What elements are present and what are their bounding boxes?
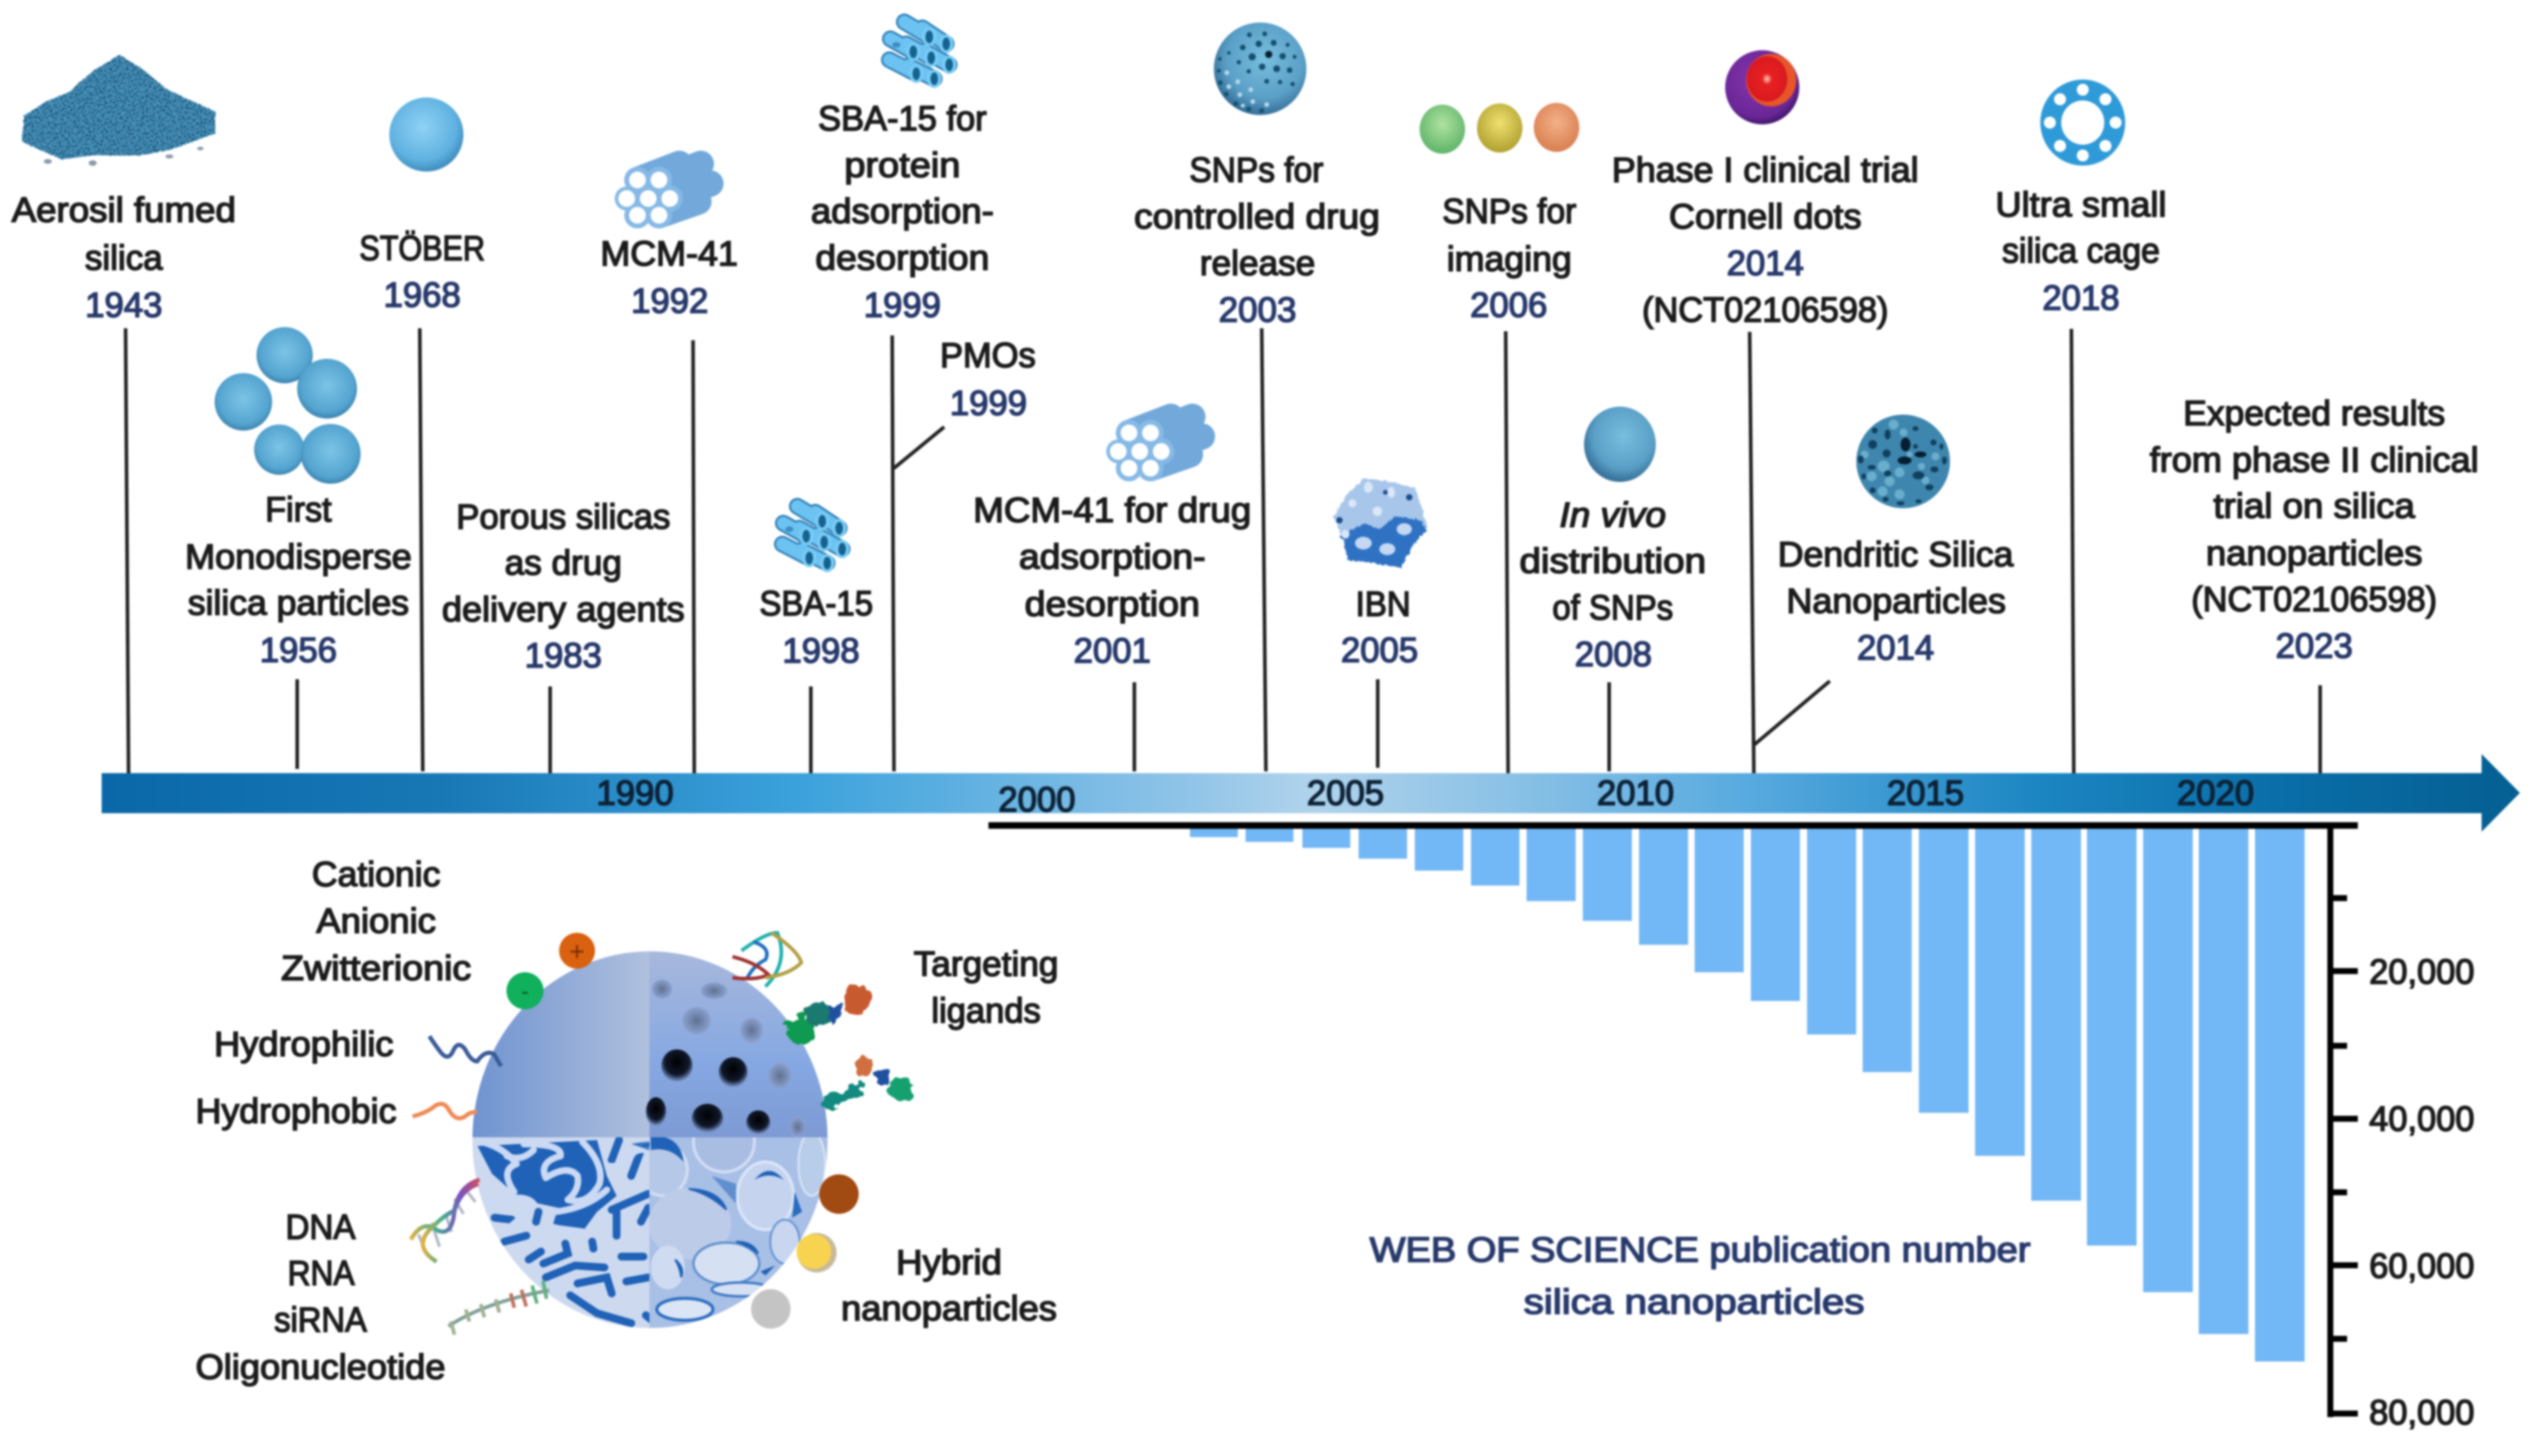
event: SBA-15 for protein adsorption-desorption 1999: 1999	[863, 286, 941, 325]
icon: charged groups: -	[521, 978, 529, 1005]
axis baseline	[988, 822, 2358, 829]
label: targeting ligands	[914, 945, 1058, 1030]
chart title	[1369, 1231, 2031, 1321]
event: Phase I clinical trial Cornell dots 2014: Phase I clinical trial	[1612, 151, 1918, 190]
event: MCM-41 for drug adsorption-desorption 2001: desorption	[1025, 585, 1200, 624]
event: Ultra small silica cage 2018: silica cage	[2002, 231, 2160, 270]
label: targeting ligands: ligands	[932, 991, 1040, 1030]
event: Expected phase II results 2023: 2023	[2276, 627, 2352, 666]
chart title: WEB OF SCIENCE publication number	[1369, 1231, 2031, 1269]
event: Phase I clinical trial Cornell dots 2014	[1612, 50, 1918, 329]
event: Aerosil fumed silica 1943: 1943	[85, 286, 163, 325]
icon: dendritic sphere	[1856, 414, 1950, 508]
decade labels: 2010	[1597, 774, 1674, 813]
event: Porous silicas as drug delivery agents 1983	[442, 497, 685, 675]
label: nucleic acids	[196, 1208, 445, 1387]
event: Dendritic Silica Nanoparticles 2014: 2014	[1857, 628, 1934, 667]
event: PMOs 1999: PMOs	[940, 336, 1036, 375]
event: SBA-15 1998: SBA-15	[759, 584, 873, 623]
event: Porous silicas as drug delivery agents 1983: delivery agents	[442, 590, 685, 629]
panel: functionalised silica nanoparticle	[196, 855, 1058, 1387]
event: SNPs for controlled drug release 2003: release	[1200, 244, 1316, 283]
chart title: silica nanoparticles	[1524, 1283, 1864, 1321]
event: MCM-41 1992: MCM-41	[600, 234, 738, 273]
event: SNPs for controlled drug release 2003: 2003	[1219, 291, 1296, 329]
label: surface charge: Cationic	[312, 855, 440, 894]
icon: SBA-15 rod	[782, 506, 849, 572]
event: SNPs for controlled drug release 2003: controlled drug	[1134, 197, 1380, 236]
label: nucleic acids: siRNA	[274, 1301, 367, 1339]
event: Expected phase II results 2023: from phase II clinical	[2150, 441, 2479, 480]
decade labels: 2000	[999, 780, 1075, 819]
icon: MCM-41 porous rod	[615, 164, 710, 228]
event: Aerosil fumed silica 1943: Aerosil fumed	[12, 191, 236, 230]
event: SNPs for controlled drug release 2003: SNPs for	[1189, 151, 1323, 190]
event: Porous silicas as drug delivery agents 1983: as drug	[505, 544, 622, 582]
decade labels: 2005	[1307, 774, 1384, 813]
event: Expected phase II results 2023: Expected results	[2183, 394, 2445, 433]
event: IBN 2005: 2005	[1341, 631, 1418, 670]
label: hybrid nanoparticles	[841, 1243, 1057, 1328]
bar chart: publications per year	[988, 822, 2474, 1432]
icon: IBN lattice	[1333, 478, 1427, 568]
pores: mesoporous quadrant	[646, 979, 806, 1137]
event: Expected phase II results 2023: nanoparticles	[2206, 534, 2422, 573]
icon: charged groups	[506, 933, 595, 1009]
label: surface charge: Zwitterionic	[281, 949, 471, 988]
event: SNPs for imaging 2006	[1420, 103, 1579, 325]
event: MCM-41 for drug adsorption-desorption 2001: MCM-41 for drug	[974, 491, 1251, 530]
event: PMOs 1999	[940, 336, 1036, 423]
event: Dendritic Silica Nanoparticles 2014: Nanoparticles	[1787, 582, 2006, 621]
event: First monodisperse silica particles 1956: 1956	[260, 631, 337, 670]
icon: charged groups: +	[569, 937, 585, 966]
event: First monodisperse silica particles 1956: Monodisperse	[185, 538, 411, 576]
event: SBA-15 1998: 1998	[782, 631, 860, 670]
event: SNPs for imaging 2006: imaging	[1447, 240, 1571, 279]
icon: three coloured spheres	[1420, 103, 1579, 154]
event: MCM-41 for drug adsorption-desorption 2001: adsorption-	[1019, 538, 1206, 576]
icon: targeting ligands	[733, 933, 913, 1109]
event: SBA-15 for protein adsorption-desorption 1999: SBA-15 for	[818, 99, 987, 138]
event: In vivo distribution of SNPs 2008: In vivo	[1560, 496, 1666, 535]
event: First monodisperse silica particles 1956	[185, 327, 411, 670]
event: Phase I clinical trial Cornell dots 2014: Cornell dots	[1669, 197, 1862, 236]
event: SNPs for imaging 2006: SNPs for	[1442, 192, 1576, 231]
event: SNPs for controlled drug release 2003	[1134, 23, 1380, 329]
event: MCM-41 1992: 1992	[631, 282, 708, 320]
label: surface charge	[281, 855, 471, 988]
event: PMOs 1999: 1999	[950, 384, 1027, 423]
event: Porous silicas as drug delivery agents 1983: Porous silicas	[456, 497, 670, 536]
label: nucleic acids: Oligonucleotide	[196, 1348, 445, 1387]
timeline connector lines	[126, 328, 2320, 773]
icon: five spheres	[215, 327, 361, 484]
event: Phase I clinical trial Cornell dots 2014: (NCT02106598)	[1642, 291, 1888, 329]
event: Ultra small silica cage 2018: 2018	[2043, 279, 2119, 318]
cavities: large-pore quadrant	[648, 1136, 827, 1323]
label: hybrid nanoparticles: Hybrid	[896, 1243, 1002, 1282]
icon: hybrid nanoparticle spheres	[751, 1174, 859, 1329]
event: SBA-15 1998	[759, 506, 873, 670]
label: targeting ligands: Targeting	[914, 945, 1058, 984]
event: First monodisperse silica particles 1956: First	[266, 490, 331, 529]
event: In vivo distribution of SNPs 2008: 2008	[1575, 635, 1652, 674]
event: Aerosil fumed silica 1943: silica	[85, 239, 163, 277]
y axis labels	[2369, 953, 2474, 1432]
decade labels: 2015	[1887, 774, 1964, 813]
decade labels	[597, 774, 2254, 819]
label: hydrophilic: Hydrophilic	[214, 1025, 393, 1064]
icon: silica cage ring	[2040, 80, 2125, 166]
event: MCM-41 for drug adsorption-desorption 2001: 2001	[1074, 631, 1151, 670]
y axis	[2327, 825, 2358, 1417]
icon: hydrophilic chain	[429, 1036, 501, 1066]
event: Phase I clinical trial Cornell dots 2014: 2014	[1727, 244, 1803, 283]
labyrinth: worm-like quadrant	[477, 1136, 651, 1329]
event: First monodisperse silica particles 1956: silica particles	[188, 584, 409, 622]
label: hydrophobic: Hydrophobic	[196, 1092, 396, 1131]
icon: DNA helix	[411, 1180, 480, 1262]
event: Dendritic Silica Nanoparticles 2014	[1778, 414, 2014, 667]
event: MCM-41 1992	[600, 164, 738, 320]
icon: nanoparticle sphere	[472, 951, 829, 1329]
event: SBA-15 for protein adsorption-desorption 1999	[811, 22, 994, 325]
label: nucleic acids: RNA	[288, 1254, 355, 1293]
event: Porous silicas as drug delivery agents 1983: 1983	[525, 636, 602, 675]
event: SNPs for imaging 2006: 2006	[1470, 286, 1548, 325]
label: nucleic acids: DNA	[286, 1208, 356, 1247]
y axis labels: 40,000	[2369, 1100, 2474, 1138]
y axis labels: 60,000	[2369, 1247, 2474, 1286]
y axis labels: 20,000	[2369, 953, 2474, 991]
bars	[1190, 829, 2305, 1362]
event: Ultra small silica cage 2018: Ultra small	[1995, 185, 2166, 224]
event: SBA-15 for protein adsorption-desorption 1999: protein	[844, 146, 960, 185]
event: Stöber 1968: STÖBER	[359, 229, 485, 268]
icon: oligonucleotide strand	[448, 1281, 549, 1335]
icon: sphere	[1584, 407, 1656, 482]
event: IBN 2005: IBN	[1356, 585, 1411, 624]
event: Expected phase II results 2023: (NCT02106598)	[2191, 580, 2437, 619]
icon: Cornell dot	[1725, 50, 1799, 124]
label: hybrid nanoparticles: nanoparticles	[841, 1289, 1057, 1328]
event: In vivo distribution of SNPs 2008: distribution	[1519, 542, 1706, 581]
event: Dendritic Silica Nanoparticles 2014: Dendritic Silica	[1778, 535, 2014, 574]
decade labels: 1990	[597, 774, 673, 813]
event: Expected phase II results 2023: trial on silica	[2214, 487, 2415, 526]
event: Expected phase II results 2023	[2150, 394, 2479, 666]
event: SBA-15 for protein adsorption-desorption 1999: desorption	[816, 239, 989, 277]
event: MCM-41 for drug adsorption-desorption 2001	[974, 417, 1251, 670]
event: In vivo distribution of SNPs 2008	[1519, 407, 1706, 674]
y axis labels: 80,000	[2369, 1393, 2474, 1432]
event: IBN 2005	[1333, 478, 1427, 670]
event: SBA-15 for protein adsorption-desorption 1999: adsorption-	[811, 192, 994, 231]
event: Aerosil fumed silica 1943	[12, 55, 236, 325]
icon: MCM-41 porous rod	[1106, 417, 1202, 481]
icon: porous sphere	[1214, 23, 1307, 115]
event: Stöber 1968	[359, 97, 485, 315]
icon: SBA-15 rod	[889, 22, 956, 88]
icon: sphere	[389, 97, 463, 172]
icon: hydrophobic chain	[413, 1104, 477, 1118]
icon: powder pile	[22, 55, 215, 166]
decade labels: 2020	[2177, 774, 2254, 813]
label: surface charge: Anionic	[316, 902, 436, 941]
timeline arrow	[102, 754, 2520, 832]
event: In vivo distribution of SNPs 2008: of SNPs	[1552, 588, 1673, 627]
event: Ultra small silica cage 2018	[1995, 80, 2166, 318]
event: Stöber 1968: 1968	[384, 276, 460, 315]
